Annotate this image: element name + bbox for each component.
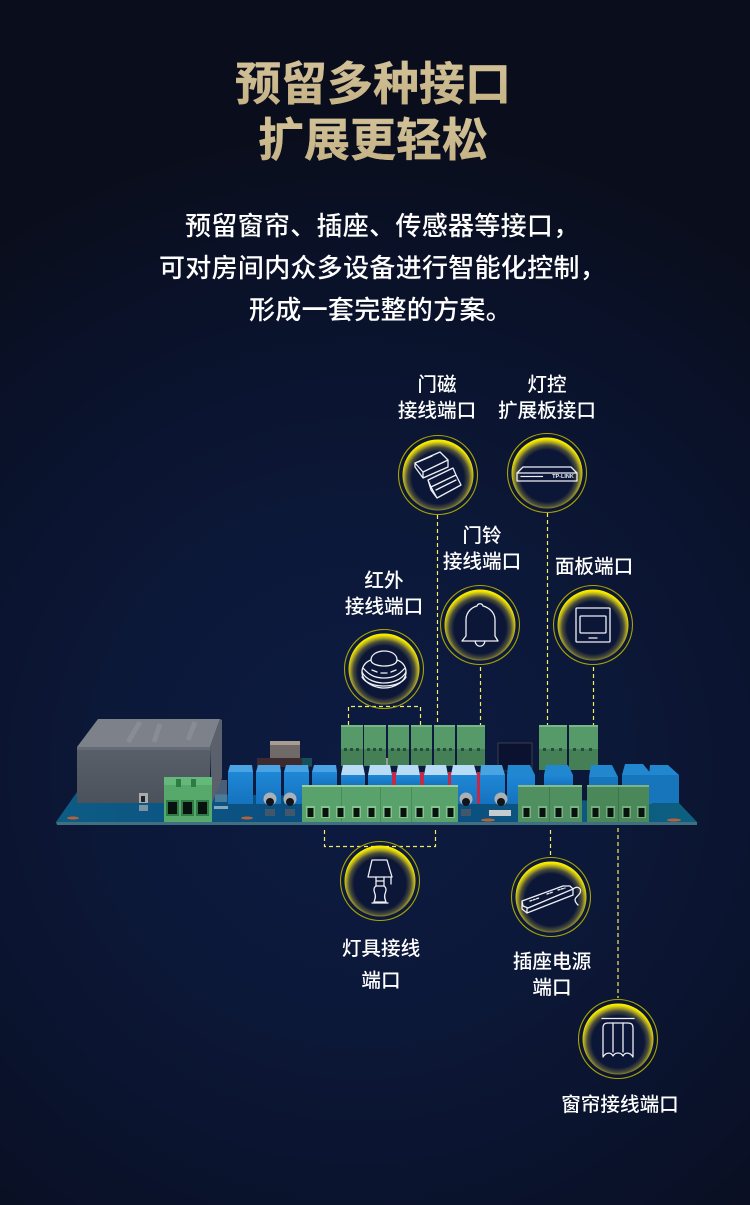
label: infrared port: 接线端口 [345, 596, 423, 618]
label: curtain port: 窗帘接线端口 [561, 1094, 679, 1116]
label: doorbell port [443, 525, 521, 573]
icon: door sensor [398, 436, 478, 514]
label: light control port: 扩展板接口 [498, 400, 596, 422]
circuit board product [56, 719, 697, 825]
label: lamp port: 端口 [361, 970, 401, 992]
description text: 预留窗帘、插座、传感器等接口， [185, 211, 580, 241]
description text [159, 211, 606, 325]
label: door sensor port: 接线端口 [398, 400, 476, 422]
metal transformer box [77, 719, 222, 811]
label: infrared port: 红外 [364, 570, 404, 592]
label: socket power port: 端口 [532, 977, 572, 999]
label: socket power port [513, 951, 592, 999]
title: 预留多种接口 [235, 58, 511, 110]
label: door sensor port [398, 374, 476, 422]
icon: wall panel [554, 586, 632, 664]
green terminal block long [302, 785, 458, 822]
dashed connector lines [324, 513, 618, 998]
icon: power strip [512, 858, 590, 936]
description text: 可对房间内众多设备进行智能化控制， [159, 253, 606, 283]
green terminal block curtain [587, 785, 649, 822]
label: lamp port [342, 938, 420, 992]
blue relays [228, 764, 679, 804]
title [235, 58, 511, 166]
label: doorbell port: 门铃 [462, 525, 502, 547]
icon: network switch [508, 434, 586, 512]
board base [56, 780, 697, 825]
label: light control port: 灯控 [527, 374, 567, 396]
icon: infrared sensor [344, 630, 424, 708]
green terminal block socket [518, 785, 582, 822]
icon: curtain [578, 1000, 658, 1078]
label: lamp port: 灯具接线 [342, 938, 420, 960]
label: light control port [498, 374, 596, 422]
label: socket power port: 插座电源 [513, 951, 592, 973]
upper green connectors [341, 725, 598, 770]
icon: network switch: TP-LINK [552, 474, 574, 480]
description text: 形成一套完整的方案。 [249, 295, 512, 325]
label: door sensor port: 门磁 [417, 374, 457, 396]
green terminal block three pin [164, 777, 212, 822]
label: infrared port [345, 570, 423, 618]
title: 扩展更轻松 [258, 114, 488, 166]
metal knobs [264, 792, 511, 816]
icon: table lamp [340, 842, 420, 920]
icon: bell [440, 586, 520, 664]
label: doorbell port: 接线端口 [443, 551, 521, 573]
capacitors and dark component [257, 741, 532, 771]
label: panel port: 面板端口 [555, 556, 633, 578]
